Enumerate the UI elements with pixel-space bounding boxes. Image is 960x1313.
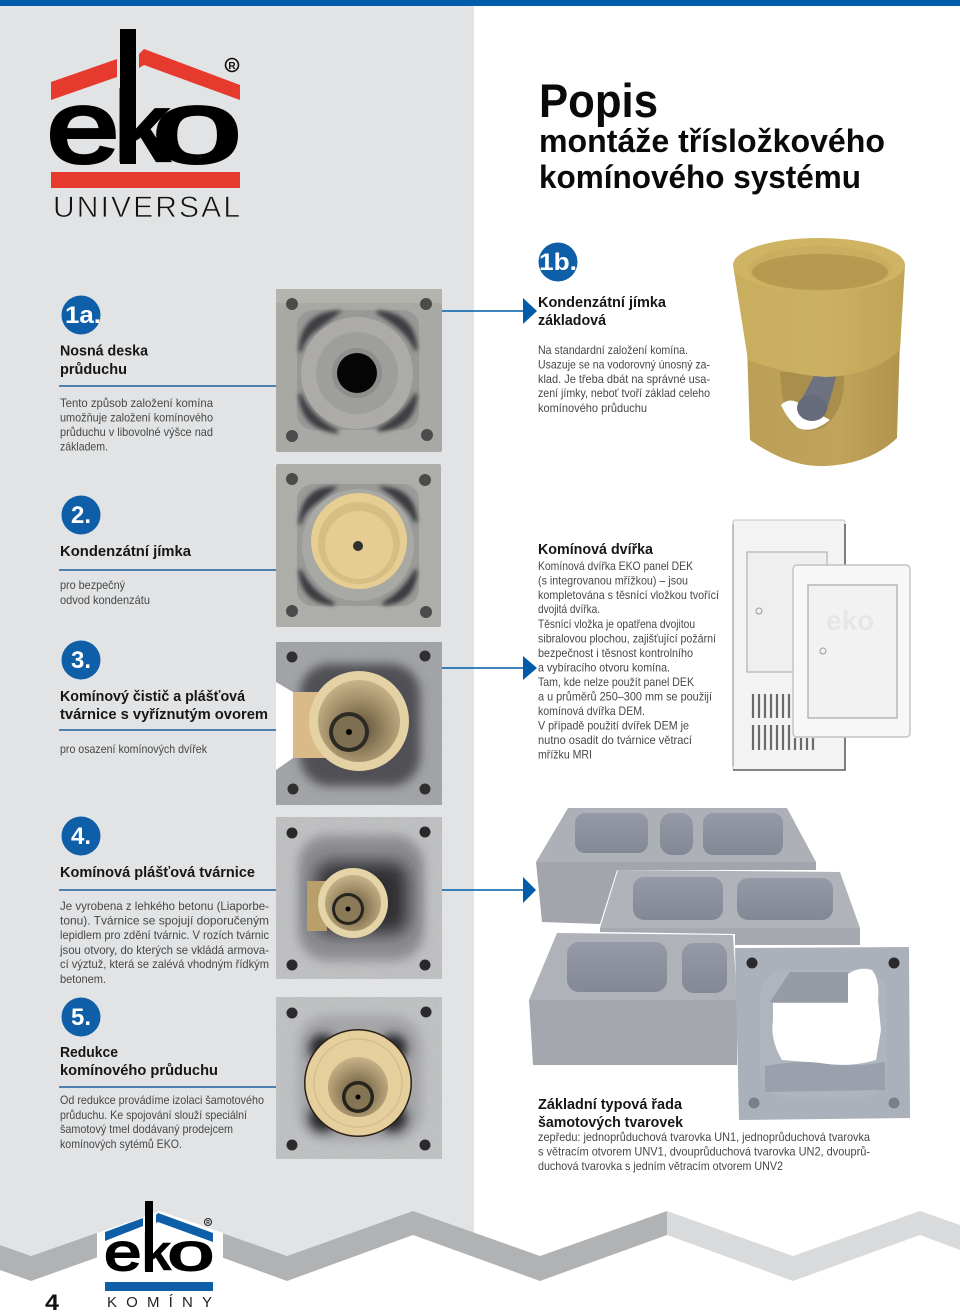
text chimney doors: nutno osadit do tvárnice větrací: [538, 733, 693, 747]
text 4: betonem.: [60, 972, 106, 986]
heading 5: Redukce: [60, 1044, 118, 1061]
text chimney doors: V případě použití dvířek DEM je: [538, 718, 689, 732]
badge 4: 4.: [71, 823, 91, 850]
text 3: pro osazení komínových dvířek: [60, 742, 208, 756]
text: basic range: s větracím otvorem UNV1, dvouprůduchová tvarovka UN2, dvouprů-: [538, 1144, 870, 1158]
text: basic range: duchová tvarovka s jedním větracím otvorem UNV2: [538, 1159, 783, 1173]
text 1b: zení jímky, neboť tvoří základ celeho: [538, 386, 710, 400]
badge 5: [62, 998, 100, 1036]
top blue bar: [0, 0, 960, 6]
text 1a: základem.: [60, 440, 108, 454]
text 1b: komínového průduchu: [538, 401, 647, 415]
text: basic range: zepředu: jednoprůduchová tvarovka UN1, jednoprůduchová tvarovka: [538, 1130, 870, 1144]
photo 1a: base plate: [276, 289, 442, 452]
text chimney doors: a u průměrů 250–300 mm se použijí: [538, 690, 713, 704]
text 1a: průduchu v libovolné výšce nad: [60, 425, 213, 439]
badge 2: [62, 496, 100, 534]
text 1b: Usazuje se na vodorovný únosný za-: [538, 358, 710, 372]
text 4: [59, 899, 269, 986]
text 5: šamotový tmel dodávaný prodejcem: [60, 1122, 233, 1136]
heading 1a: [60, 342, 149, 378]
footer logo: eko komíny: o: [168, 1224, 214, 1282]
text 4: Je vyrobena z lehkého betonu (Liaporbe-: [60, 899, 269, 913]
text 4: lepidlem pro zdění tvárnic. V rozích tvárnic: [60, 928, 269, 942]
text chimney doors: Těsnící vložka je opatřena dvojitou: [538, 617, 695, 631]
title: [539, 74, 885, 195]
heading 3: [60, 688, 268, 723]
text 2: pro bezpečný: [60, 578, 125, 592]
text chimney doors: (s integrovanou mřížkou) – jsou: [538, 574, 688, 588]
text 1b: klad. Je třeba dbát na správné usa-: [538, 372, 710, 386]
text chimney doors: sibralovou plochou, zajišťující požární: [538, 632, 717, 646]
text chimney doors: Komínová dvířka EKO panel DEK: [538, 559, 693, 573]
footer logo: eko komíny: k: [141, 1224, 172, 1282]
footer logo: eko komíny: R: [206, 1220, 210, 1226]
title: komínového systému: [539, 159, 861, 195]
photo 4: jacket block: [276, 817, 442, 979]
badge 3: [62, 640, 100, 680]
logo: eko universal: [47, 29, 242, 224]
connector lines to photos: [59, 386, 277, 1087]
photo: chimney doors: eko: [826, 605, 874, 636]
badge 1b: 1b.: [539, 249, 577, 276]
gray left panel: [0, 6, 474, 1256]
text chimney doors: kompletována s těsnící vložkou tvořící: [538, 588, 720, 602]
text 5: komínových sytémů EKO.: [60, 1137, 182, 1151]
arrow: to block range: [441, 877, 536, 903]
heading 5: komínového průduchu: [60, 1062, 218, 1079]
badge 4: [62, 816, 100, 856]
text chimney doors: dvojitá dvířka.: [538, 602, 600, 616]
text 4: cí výztuž, která se zalévá vhodným řídkým: [60, 957, 269, 971]
text 1a: umožňuje založení komínového: [60, 410, 213, 424]
heading: basic range: [538, 1096, 684, 1131]
logo: eko universal: R: [228, 61, 236, 72]
text chimney doors: bezpečnost i těsnost kontrolního: [538, 646, 693, 660]
heading 3: Komínový čistič a plášťová: [60, 688, 246, 705]
text 2: odvod kondenzátu: [60, 593, 150, 607]
heading: basic range: Základní typová řada: [538, 1096, 683, 1113]
text 4: jsou otvory, do kterých se vkládá armova-: [59, 943, 269, 957]
heading 2: Kondenzátní jímka: [60, 543, 192, 560]
text: basic range: [538, 1130, 870, 1173]
text 1a: Tento způsob založení komína: [60, 396, 213, 410]
text chimney doors: a vybíracího otvoru komína.: [538, 660, 670, 674]
logo: eko universal: e: [47, 70, 119, 184]
footer logo: eko komíny: [97, 1201, 223, 1311]
text 2: [60, 578, 150, 607]
heading 5: [60, 1044, 218, 1079]
photo: chimney doors: [733, 520, 910, 770]
heading 1a: průduchu: [60, 361, 127, 378]
arrow: to condensate pit base: [441, 298, 537, 324]
text chimney doors: mřížku MRI: [538, 748, 592, 762]
text 1b: Na standardní založení komína.: [538, 343, 688, 357]
footer logo: eko komíny: KOMÍNY: [107, 1294, 212, 1311]
photo 5: reducer: [276, 997, 442, 1159]
text chimney doors: [538, 559, 720, 762]
badge 1a: [62, 296, 101, 334]
text 1a: [60, 396, 213, 454]
title: montáže třísložkového: [539, 123, 885, 159]
text chimney doors: komínová dvířka DEM.: [538, 704, 645, 718]
footer logo: eko komíny: e: [104, 1224, 141, 1282]
heading 4: Komínová plášťová tvárnice: [60, 864, 255, 881]
heading 1a: Nosná deska: [60, 342, 149, 360]
heading 1b: základová: [538, 312, 607, 329]
badge 1a: 1a.: [65, 302, 101, 329]
text 5: průduchu. Ke spojování slouží speciální: [60, 1108, 248, 1122]
photo: basic range of blocks: [529, 808, 910, 1120]
text 1b: [538, 343, 710, 415]
heading 1b: [538, 294, 667, 329]
logo: eko universal: k: [112, 70, 172, 184]
badge 2: 2.: [71, 502, 91, 529]
text 5: [60, 1093, 264, 1151]
photo 1b: condensate pit cylinder: [733, 238, 905, 466]
heading 1b: Kondenzátní jímka: [538, 294, 667, 311]
arrow: to chimney doors: [441, 656, 537, 680]
title: Popis: [539, 74, 658, 127]
footer zigzag band: [0, 1211, 960, 1281]
badge 1b: [538, 242, 578, 282]
photo 3: block with door cutout and cleaner: [276, 642, 442, 805]
text 4: tonu). Tvárnice se spojují doporučeným: [60, 914, 269, 928]
text 5: Od redukce provádíme izolaci šamotového: [60, 1093, 264, 1107]
heading: basic range: šamotových tvarovek: [538, 1114, 684, 1131]
heading chimney doors: Komínová dvířka: [538, 541, 654, 558]
badge 5: 5.: [71, 1004, 91, 1031]
photo 2: plate with condensate insert: [276, 464, 441, 627]
badge 3: 3.: [71, 647, 91, 674]
text chimney doors: Tam, kde nelze použít panel DEK: [538, 675, 694, 689]
logo: eko universal: o: [153, 70, 242, 184]
logo: eko universal: UNIVERSAL: [53, 191, 240, 224]
heading 3: tvárnice s vyříznutým ovorem: [60, 706, 268, 723]
